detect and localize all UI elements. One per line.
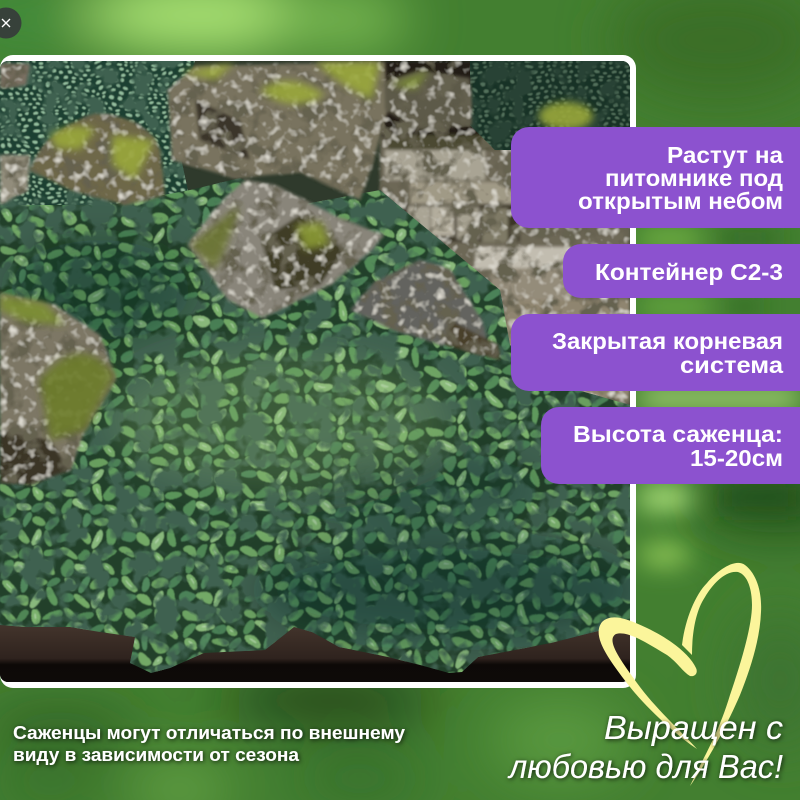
rock: far left stone	[0, 155, 30, 205]
badge: seedling height: Высота саженца:	[573, 421, 783, 447]
photo: rock garden with groundcover plant	[0, 61, 630, 682]
close button	[0, 8, 22, 38]
rock: right grey	[350, 260, 490, 350]
moss patches	[0, 62, 593, 440]
stone steps	[380, 61, 630, 405]
slogan: grown with love: любовью для Вас!	[507, 748, 783, 785]
rock: top right	[384, 70, 472, 130]
badge: container	[563, 244, 800, 298]
badge: grown outdoors: Растут на	[667, 142, 783, 168]
badge: grown outdoors: питомнике под	[605, 165, 783, 191]
slogan: grown with love	[507, 709, 784, 785]
badge: seedling height: 15-20см	[690, 445, 783, 471]
caption: seedlings may differ: виду в зависимости от сезона	[13, 745, 300, 765]
photo frame: white rounded border	[0, 55, 636, 688]
rock: top centre	[168, 62, 388, 200]
badge: closed root system: Закрытая корневая	[552, 328, 783, 354]
rock: centre	[188, 180, 384, 318]
caption: seedlings may differ: Саженцы могут отличаться по внешнему	[13, 723, 405, 743]
top foliage: fine pale speckled leaves	[0, 61, 630, 205]
badge: grown outdoors	[511, 127, 800, 228]
rocks	[0, 62, 500, 485]
rock: left mossy	[30, 114, 165, 205]
badge: closed root system	[511, 314, 800, 391]
badge: grown outdoors: открытым небом	[578, 188, 783, 214]
badge: seedling height	[541, 407, 800, 484]
slogan: grown with love: Выращен с	[604, 709, 784, 746]
caption: seedlings may differ	[13, 723, 405, 765]
soil strip	[0, 620, 630, 682]
rock: lower left mossy	[0, 293, 116, 485]
icon: hand-drawn yellow heart	[599, 563, 761, 786]
badge: closed root system: система	[680, 352, 783, 378]
main groundcover foliage	[0, 178, 630, 673]
badge: container: Контейнер С2-3	[595, 259, 783, 285]
